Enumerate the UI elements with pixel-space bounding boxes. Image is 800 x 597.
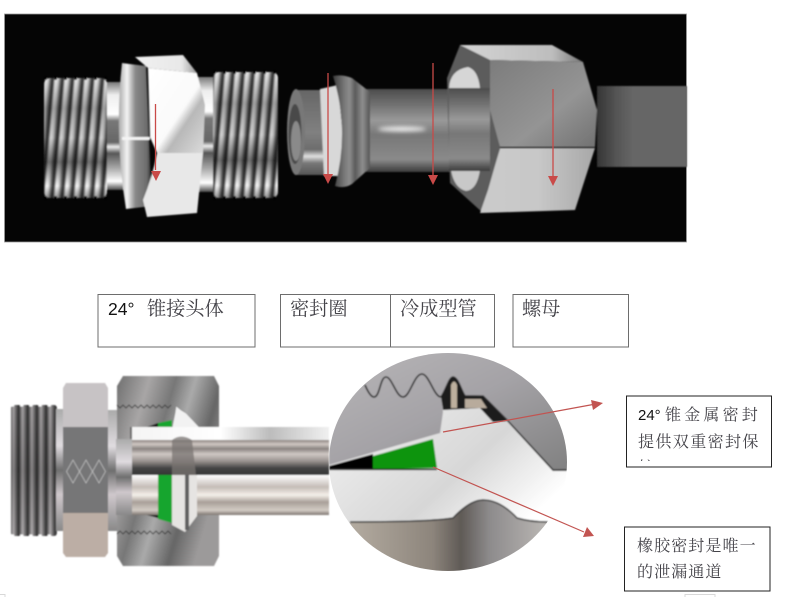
hex body with logo xyxy=(63,383,117,557)
nut cross-section xyxy=(117,376,219,566)
lower tube section xyxy=(350,500,547,571)
callout: 24° metal seal: 锥金属密封 xyxy=(665,406,761,424)
upper nut section xyxy=(328,350,570,471)
green rubber seal xyxy=(373,439,437,469)
part labels row xyxy=(98,294,628,347)
cross-section assembly diagram xyxy=(11,376,329,566)
label: cold-formed tube xyxy=(390,294,494,347)
label: cold-formed tube: 冷成型管 xyxy=(400,298,477,320)
label: nut: 螺母 xyxy=(522,298,560,320)
male threaded end xyxy=(11,405,64,536)
callout: 24° metal seal: 提供双重密封保 xyxy=(638,432,760,451)
label: cone body xyxy=(98,294,255,347)
black seal gap xyxy=(329,454,373,469)
label: cone body: 24° xyxy=(108,299,134,319)
red arrows xyxy=(151,63,558,186)
nut threads and cone tip xyxy=(117,405,200,534)
label: sealing ring: 密封圈 xyxy=(290,298,348,320)
tube bore xyxy=(116,427,329,532)
callout: 24° metal seal xyxy=(626,396,772,468)
callout arrow: rubber seal xyxy=(433,467,594,537)
edge artefacts xyxy=(0,594,715,597)
cone tip and dark cavity xyxy=(441,377,507,422)
circular detail magnifier xyxy=(328,350,570,572)
callout arrow: metal seal xyxy=(443,400,603,432)
panel: exploded fitting photo xyxy=(4,14,687,242)
label: nut xyxy=(513,294,628,347)
union nut and pipe xyxy=(447,45,687,213)
24° cone fitting body xyxy=(44,55,278,217)
callout: rubber seal: 橡胶密封是唯一 xyxy=(637,537,757,555)
label: sealing ring xyxy=(280,294,390,347)
label: cone body: 锥接头体 xyxy=(147,298,224,320)
callout: 24° metal seal: 护 xyxy=(638,459,655,477)
callout: rubber seal: 的泄漏通道 xyxy=(637,563,723,581)
callout: 24° metal seal: 24° xyxy=(638,407,661,424)
thread profile xyxy=(365,374,441,397)
callout: rubber seal xyxy=(624,527,770,591)
sealing ring and tube xyxy=(287,75,491,187)
